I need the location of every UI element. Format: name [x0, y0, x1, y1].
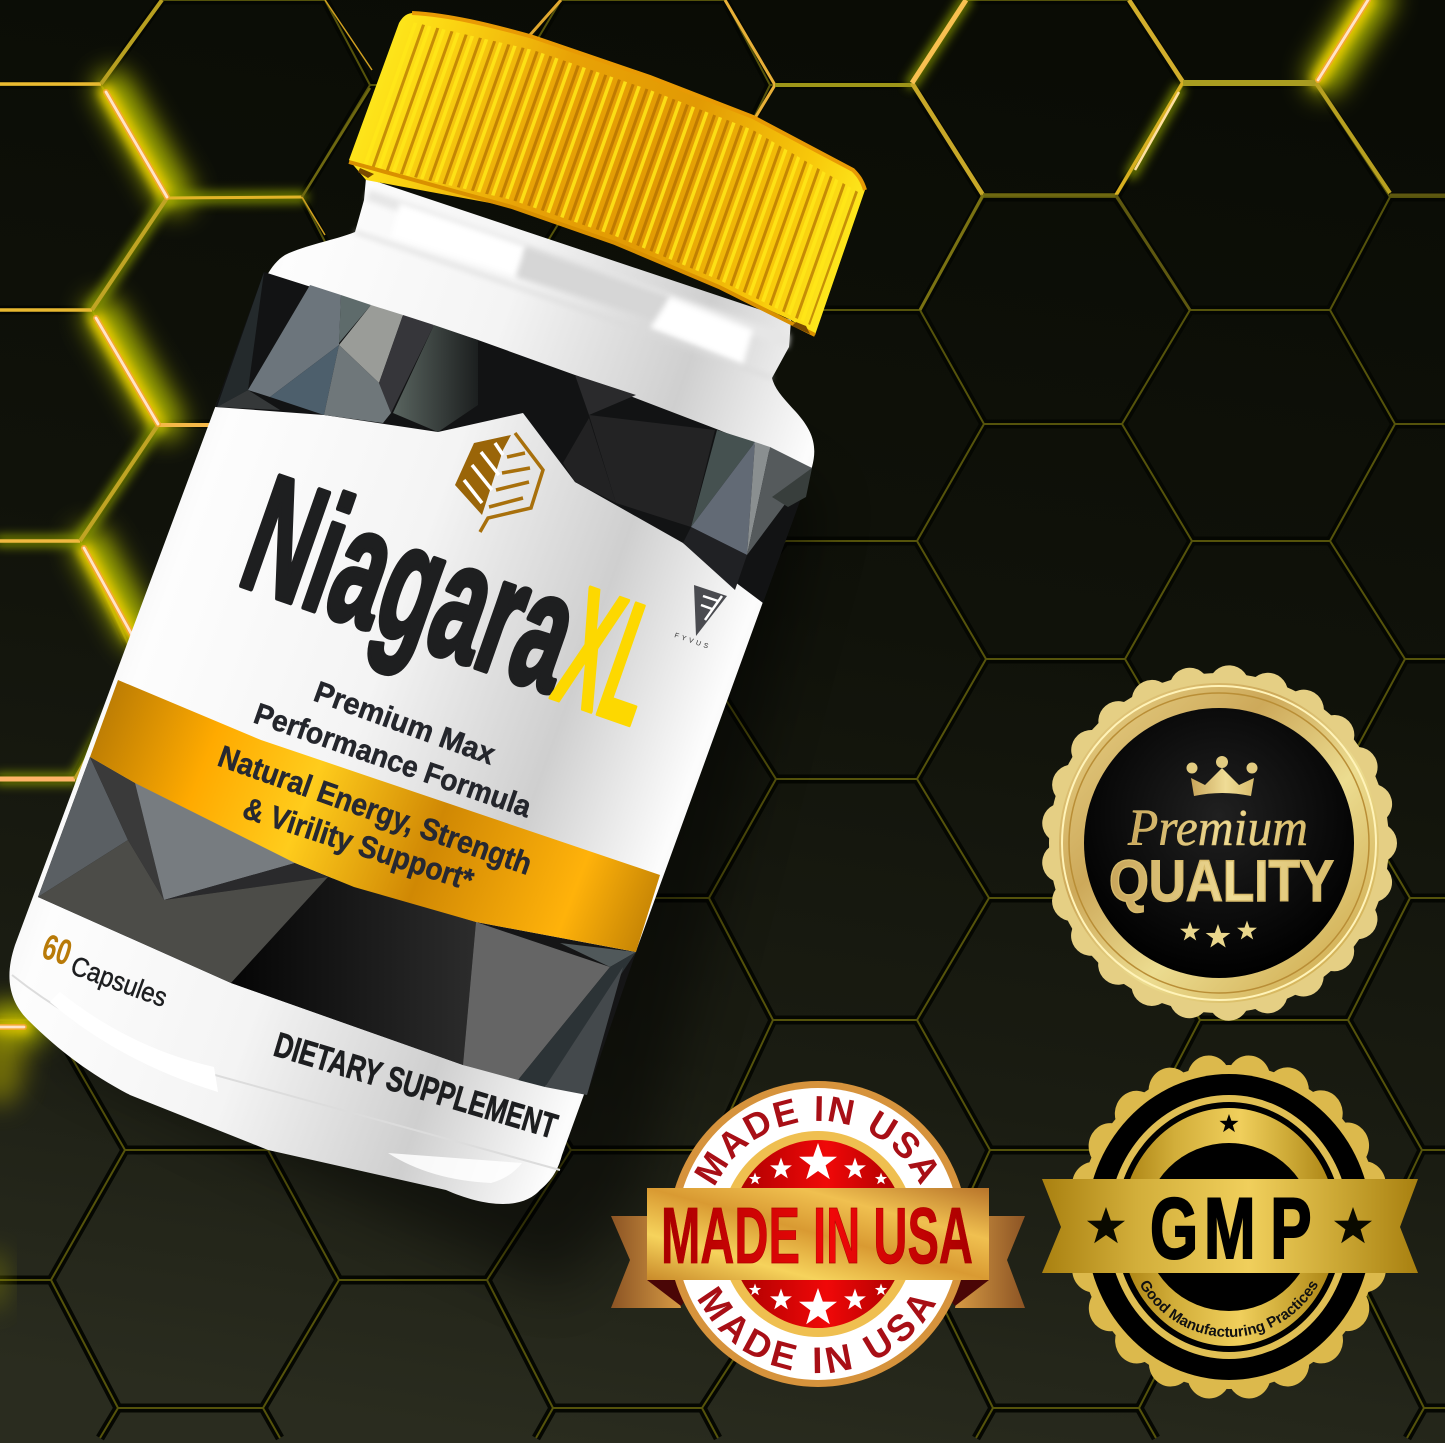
- tagline line 2: Performance Formula: [250, 697, 536, 824]
- benefit line 2: & Virility Support*: [239, 790, 479, 898]
- product name: Niagara: Niagara: [223, 440, 601, 728]
- logo: FYVUS: [673, 585, 727, 651]
- dietary supplement text: DIETARY SUPPLEMENT: [270, 1025, 562, 1146]
- label facets bottom: [38, 757, 636, 1095]
- top dark label band: [215, 272, 812, 603]
- badge: Made in USA: MADE IN USA: [698, 1286, 936, 1374]
- curved text: top: [705, 1121, 931, 1234]
- badge: GMP: [1042, 1056, 1418, 1398]
- benefit line 1: Natural Energy, Strength: [214, 739, 536, 882]
- product name: XL: XL: [537, 553, 683, 761]
- scalloped gold edge: [1049, 673, 1389, 1013]
- concentric rings: [1086, 1074, 1372, 1380]
- top star: [1220, 1114, 1238, 1132]
- capsule count: Capsules: [67, 950, 171, 1013]
- lower dark label band: [38, 757, 636, 1095]
- cap: [349, 13, 865, 335]
- black disc: [1084, 708, 1354, 978]
- capsule count: 60: [38, 926, 77, 973]
- QUALITY: QUALITY: [1109, 849, 1334, 914]
- capsule count: [38, 926, 171, 1013]
- curved text: bottom: [682, 1234, 954, 1373]
- bottle shadow: [60, 300, 820, 1290]
- white stars: [749, 1143, 887, 1324]
- badge: Premium Quality: [1049, 673, 1389, 1013]
- crown: [1186, 756, 1258, 796]
- bottom rim details: [12, 975, 560, 1183]
- gold ring and white disc: [668, 1081, 968, 1387]
- ribbon text: MADE IN USA: [661, 1191, 973, 1280]
- badge: GMP: Good Manufacturing Practices: [1141, 1280, 1318, 1338]
- logo: FYVUS: FYVUS: [673, 632, 712, 651]
- curved text: [1124, 1227, 1334, 1337]
- tagline line 1: Premium Max: [310, 676, 500, 772]
- ribbon stars: [1087, 1207, 1372, 1243]
- badge: Made in USA: MADE IN USA: [694, 1096, 937, 1186]
- GMP text: GMP: [1150, 1180, 1312, 1276]
- ribbon tails: [611, 1216, 681, 1308]
- product bottle: [9, 13, 865, 1204]
- Premium: Premium: [1127, 800, 1308, 857]
- neck highlights: [355, 190, 790, 378]
- label facets top: [217, 272, 812, 590]
- scalloped gold edge: [1077, 1065, 1381, 1389]
- ribbon: [1042, 1179, 1418, 1273]
- red centre: [720, 1131, 916, 1337]
- orange label band: [90, 680, 660, 952]
- main ribbon: [647, 1188, 989, 1280]
- three stars: [1180, 920, 1257, 948]
- ribbon folds: [647, 1280, 700, 1306]
- badge: Made in USA: [611, 1081, 1025, 1387]
- bottle body: [9, 178, 814, 1204]
- logo: leaf hexagon: [455, 433, 543, 532]
